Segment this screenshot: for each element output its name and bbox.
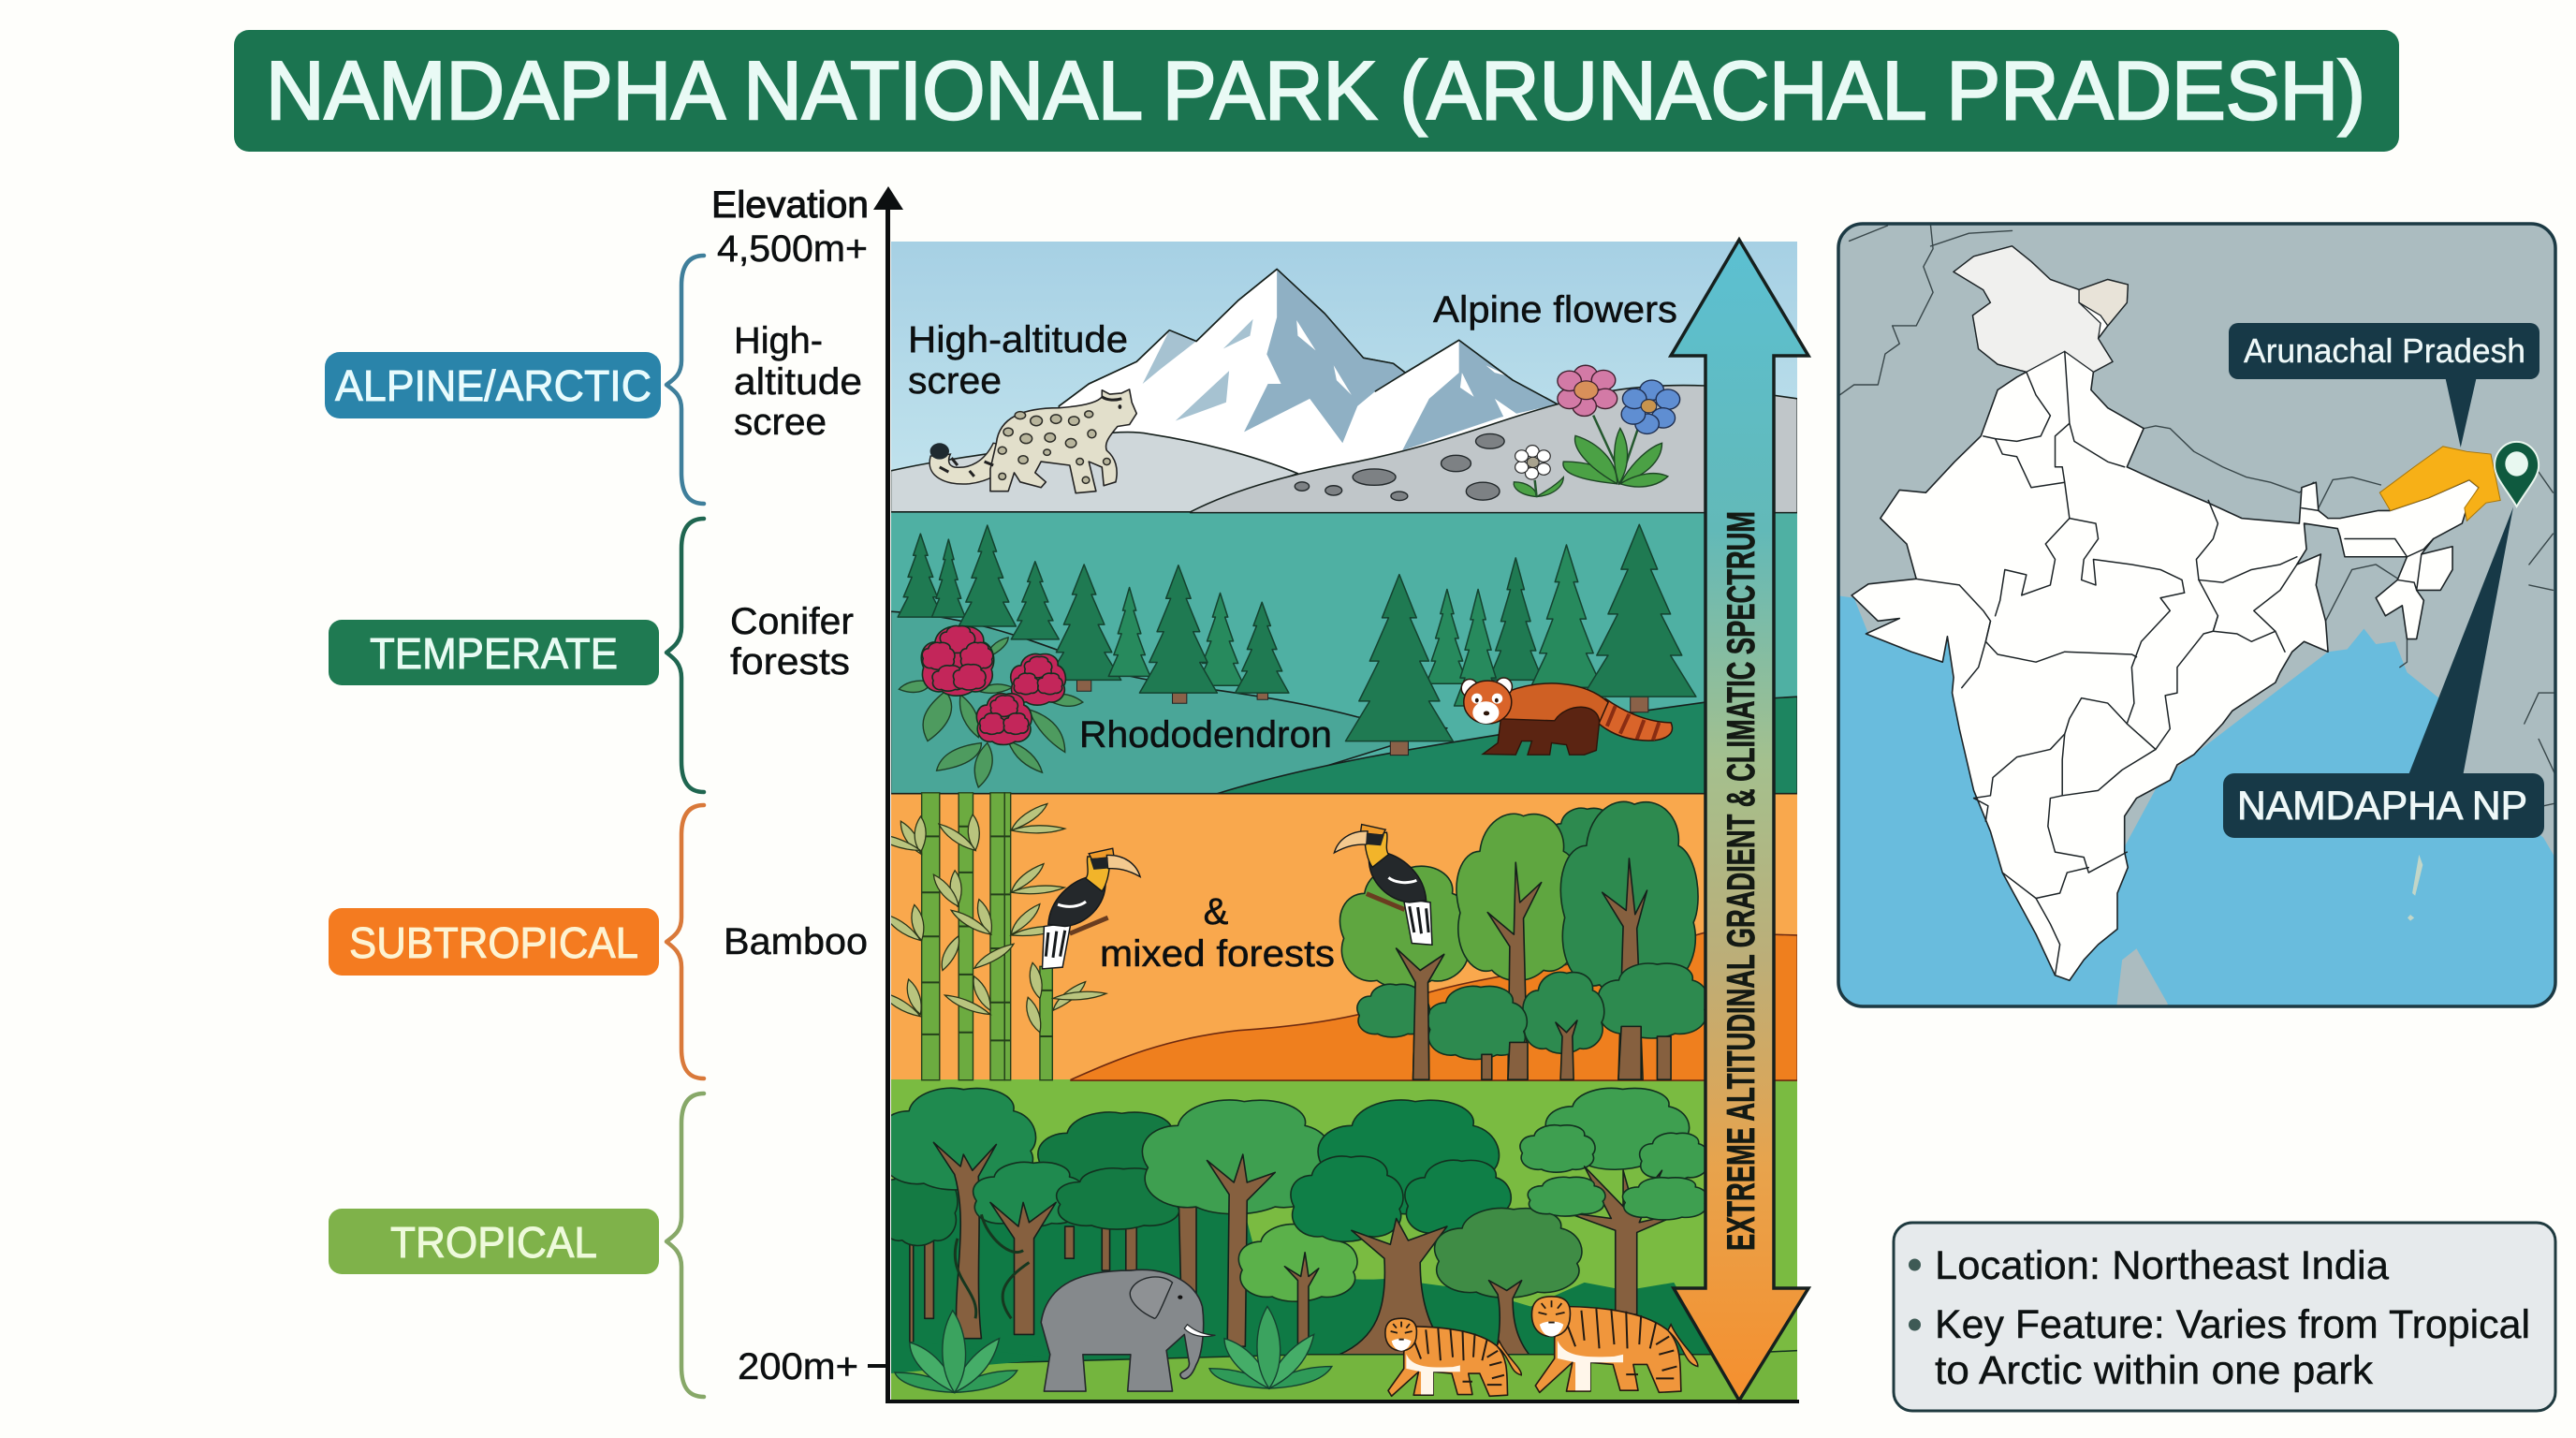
label: conifer forests: Conifer <box>730 601 854 642</box>
text: key feature line two: to Arctic within one park <box>1935 1348 2374 1393</box>
baseline <box>886 1400 1799 1403</box>
callout: arunachal pradesh <box>2229 323 2539 379</box>
conifer trees left <box>898 525 1289 703</box>
scree slopes <box>890 386 1797 513</box>
illustrated elevation panel <box>870 242 1799 1402</box>
label: conifer forests <box>730 601 854 682</box>
label: bamboo: Bamboo <box>724 921 868 962</box>
callout pointer: namdapha <box>2408 507 2513 775</box>
text: location: Location: Northeast India <box>1935 1243 2389 1288</box>
alpine scene <box>890 269 1797 794</box>
elevation and forest-type labels <box>711 184 869 1387</box>
200m tick <box>868 1364 889 1368</box>
climate zone labels and braces <box>325 256 704 1397</box>
panel text: rhododendron: Rhododendron <box>1079 714 1332 756</box>
bullet: key feature <box>1909 1318 1921 1331</box>
elevation axis <box>868 186 1799 1401</box>
map frame <box>1838 224 2555 1006</box>
elevation heading: Elevation <box>711 184 869 226</box>
temperate foreground hill <box>1217 697 1797 794</box>
key facts box <box>1894 1223 2555 1411</box>
label: tropical <box>329 1209 659 1274</box>
neighbour borders <box>1839 226 2555 827</box>
label: conifer forests: forests <box>730 641 850 682</box>
label: high-altitude scree: altitude <box>734 361 862 403</box>
elephant <box>1041 1269 1215 1391</box>
aksai chin shading <box>2079 280 2128 326</box>
band: alpine sky <box>891 242 1797 470</box>
hornbill right <box>1334 825 1432 945</box>
brace: tropical <box>666 1093 704 1397</box>
arunachal pradesh highlight <box>2379 447 2500 521</box>
label: subtropical <box>329 908 659 976</box>
conifer trees right <box>1345 524 1696 756</box>
map pin <box>2495 442 2539 506</box>
subtropical hill <box>1071 932 1797 1080</box>
plant left <box>895 1311 1017 1392</box>
snow leopard <box>929 389 1136 493</box>
title text: NAMDAPHA NATIONAL PARK (ARUNACHAL PRADESH) <box>266 44 2365 137</box>
hornbill left <box>1042 848 1140 969</box>
panel text: high-altitude scree: High-altitude <box>908 319 1128 360</box>
mountains <box>1059 269 1558 477</box>
understorey <box>890 1186 1716 1362</box>
bullet: location <box>1909 1258 1921 1271</box>
mixed forest trees <box>1339 801 1708 1079</box>
text: key feature line one: Key Feature: Varies from Tropical <box>1935 1302 2530 1347</box>
alpine flowers <box>1514 365 1680 497</box>
bottom elevation value: 200m+ <box>738 1346 858 1387</box>
red panda <box>1461 678 1672 755</box>
state boundaries <box>1916 351 2434 976</box>
jammu and kashmir shading <box>1954 246 2113 372</box>
title banner <box>234 30 2399 152</box>
andaman islands <box>2408 855 2422 921</box>
india outline <box>1852 246 2479 980</box>
label: alpine/arctic: ALPINE/ARCTIC <box>335 361 651 410</box>
panel text: alpine flowers: Alpine flowers <box>1433 289 1677 330</box>
axis arrowhead <box>873 186 903 210</box>
label: high-altitude scree: scree <box>734 402 827 443</box>
band: tropical <box>891 1079 1797 1361</box>
panel text: ampersand: & <box>1204 891 1229 932</box>
callout: namdapha np: NAMDAPHA NP <box>2237 784 2527 829</box>
panel text: high-altitude scree <box>908 319 1128 402</box>
bamboo leaves <box>870 800 1106 1033</box>
brace: alpine <box>666 256 704 504</box>
brace: subtropical <box>666 805 704 1078</box>
brace: temperate <box>666 519 704 792</box>
band: subtropical <box>891 794 1797 1080</box>
subtropical and tropical scene <box>870 793 1799 1402</box>
forest floor <box>1003 1350 1797 1363</box>
label: temperate <box>329 620 659 685</box>
callout: arunachal pradesh: Arunachal Pradesh <box>2244 331 2525 370</box>
tiger large <box>1531 1297 1698 1392</box>
map panel <box>1835 224 2558 1011</box>
label: temperate: TEMPERATE <box>370 629 618 678</box>
gradient double arrow <box>1671 240 1808 1401</box>
label: subtropical: SUBTROPICAL <box>349 918 638 967</box>
rocks <box>1295 433 1504 501</box>
panel text: mixed forests: mixed forests <box>1100 933 1335 975</box>
panel text: high-altitude scree: scree <box>908 360 1002 402</box>
label: high-altitude scree <box>734 320 862 443</box>
top elevation value: 4,500m+ <box>717 228 868 270</box>
sri lanka <box>2116 948 2168 1008</box>
callout: namdapha np <box>2223 773 2544 838</box>
tropical forest <box>880 1088 1799 1402</box>
bamboo <box>870 793 1106 1080</box>
callout pointer: arunachal <box>2445 377 2477 448</box>
label: tropical: TROPICAL <box>390 1218 597 1267</box>
label: high-altitude scree: High- <box>734 320 823 361</box>
band: temperate <box>891 513 1797 762</box>
bay and sea <box>1835 595 2558 1011</box>
arrow text: EXTREME ALTITUDINAL GRADIENT & CLIMATIC SPECTRUM <box>1719 511 1763 1251</box>
rhododendron <box>899 626 1083 787</box>
tiger small <box>1385 1318 1521 1396</box>
plant right <box>1209 1306 1332 1388</box>
temperate hills <box>890 611 1447 794</box>
